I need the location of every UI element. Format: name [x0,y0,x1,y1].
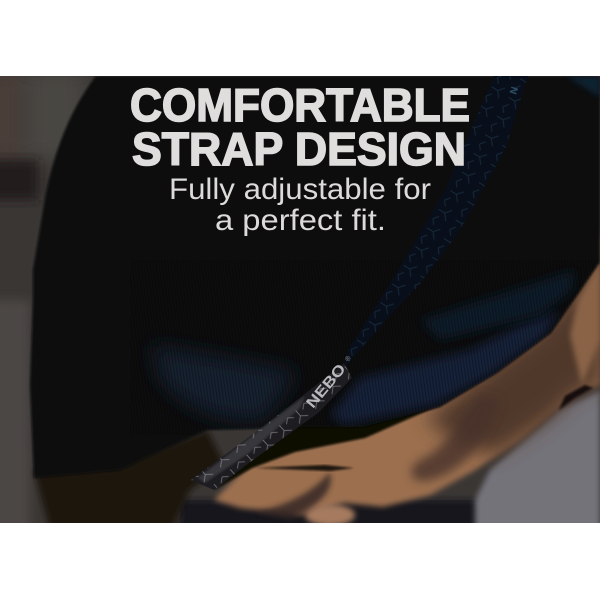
title: STRAP DESIGN [132,123,466,175]
tiny N mark: N [508,86,521,96]
registered mark: ® [343,354,353,363]
neck shadow [559,385,593,410]
subtitle: a perfect fit. [215,204,386,237]
beanie [30,76,600,478]
ear shadow [255,472,331,520]
photo: man wearing beanie and strap [0,70,600,540]
title: COMFORTABLE [130,79,470,131]
strap logo: NEBO [303,361,350,412]
strap lower, reflective pattern [191,354,353,490]
subtitle: Fully adjustable for [169,173,431,206]
infographic canvas [0,76,600,523]
hair strand [255,465,354,471]
blurred background [0,70,600,540]
hair [214,405,440,490]
grey shirt [475,390,600,530]
darker right side of head [425,230,600,455]
hair wisps left [34,430,225,530]
ear and face skin [214,230,600,526]
ribbed cuff blue light patches [150,345,298,421]
knit rib texture [130,260,600,435]
subtitle [169,173,431,237]
ear [305,504,355,526]
stubble shadow [407,423,482,486]
neck light skin [570,262,600,385]
title [130,79,470,175]
strap upper, dark blue pattern [344,76,528,368]
upper blue highlight on hat [566,76,600,97]
